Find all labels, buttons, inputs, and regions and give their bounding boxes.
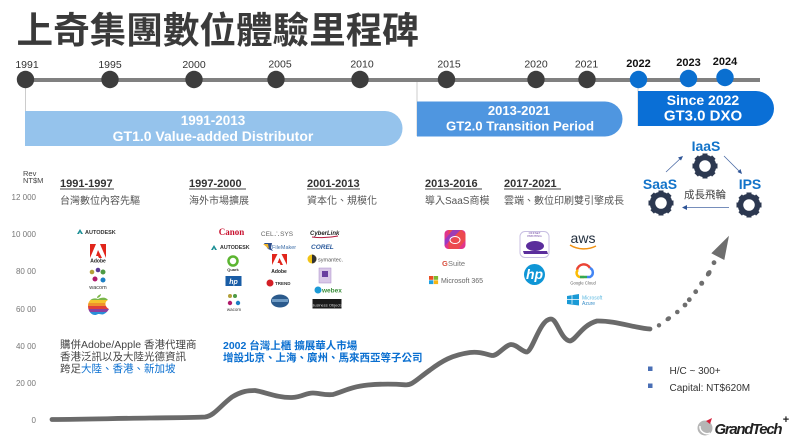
logos 1997-2000: CyberLink [310, 231, 340, 237]
timeline: 2022 [626, 58, 651, 70]
period: 2001-2013: 2001-2013 [307, 178, 360, 190]
period: 1991-1997: 台灣數位內容先驅 [60, 194, 140, 207]
timeline [15, 56, 760, 146]
timeline: 2021 [575, 58, 598, 70]
logos 2017-2021: aws [571, 230, 595, 246]
note: acquisitions: 購併Adobe/Apple 香港代理商 [60, 338, 197, 351]
growth flywheel: 成長飛輪 [684, 188, 726, 201]
logos 1997-2000: wacom [227, 307, 241, 312]
era bar: GT3.0: Since 2022 [667, 92, 739, 108]
logos 1997-2000: Canon [219, 227, 244, 237]
timeline: 2005 [268, 58, 292, 70]
era bar: GT2.0: GT2.0 Transition Period [446, 118, 594, 134]
timeline: 2015 [437, 58, 461, 70]
period: 1997-2000: 1997-2000 [189, 178, 242, 190]
logos 2017-2021: PRINTING [527, 234, 542, 238]
y axis: 10 000 [12, 230, 37, 239]
logos 2017-2021: Google Cloud [570, 280, 596, 286]
timeline: 2020 [524, 58, 548, 70]
company stats: Capital: NT$620M [670, 383, 750, 394]
logos 1991-1997: Adobe [90, 258, 106, 264]
logos 2013-2016: Suite [448, 259, 465, 268]
logo: GrandTech [698, 414, 789, 438]
logos 1991-1997: AUTODESK [85, 230, 116, 236]
y axis: 60 00 [16, 305, 37, 314]
period: 1991-1997: 1991-1997 [60, 178, 113, 190]
logos 1997-2000: hp [229, 279, 238, 286]
logos 2013-2016 [429, 230, 483, 285]
logos 1997-2000: COREL [311, 244, 334, 251]
era bar: GT1.0: 1991-2013 [181, 113, 246, 128]
logos 1997-2000: Business Objects [312, 302, 342, 308]
period: 1997-2000 [189, 178, 249, 207]
logos 2013-2016: Microsoft 365 [441, 278, 483, 285]
logos 1997-2000: Adobe [271, 269, 287, 275]
logos 1997-2000: TREND [275, 281, 291, 286]
timeline: 2010 [350, 58, 374, 70]
period: 2017-2021: 2017-2021 [504, 178, 557, 190]
logos 2013-2016: G [442, 259, 448, 268]
era bar: GT1.0: GT1.0 Value-added Distributor [113, 128, 314, 144]
logos 2017-2021: Microsoft [582, 296, 603, 302]
logo: GrandTech: + [783, 414, 789, 426]
logos 1997-2000: FileMaker [272, 245, 296, 251]
timeline: 1991 [15, 59, 39, 71]
period: 2013-2016 [425, 178, 489, 207]
growth flywheel: IPS [739, 176, 761, 192]
logos 1991-1997: wacom [88, 285, 107, 291]
period: 2013-2016: 2013-2016 [425, 178, 478, 190]
note: acquisitions: 跨足大陸、香港、新加坡 [60, 362, 176, 375]
period: 2001-2013: 資本化、規模化 [307, 194, 377, 207]
note: 2002 listing: 2002 台灣上櫃 擴展華人市場 [223, 339, 358, 352]
y axis: Rev [23, 169, 37, 178]
period: 1991-1997 [60, 178, 140, 207]
title: 上奇集團數位體驗里程碑 [16, 1, 419, 54]
period: 2017-2021: 雲端、數位印刷雙引擎成長 [504, 194, 624, 207]
company stats [648, 366, 750, 394]
logos 1991-1997 [77, 229, 116, 316]
y axis: NT$M [23, 176, 43, 185]
period: 2001-2013 [307, 178, 377, 207]
company stats: H/C ~ 300+ [670, 366, 721, 377]
y axis: 80 00 [16, 267, 37, 276]
logos 1997-2000: CEL∴SYS [261, 231, 294, 238]
y axis: 20 00 [16, 379, 37, 388]
y axis: 40 00 [16, 342, 37, 351]
timeline: 1995 [98, 59, 122, 71]
period: 1997-2000: 海外市場擴展 [189, 194, 249, 207]
y axis [12, 169, 43, 425]
note: 2002 listing: 增設北京、上海、廣州、馬來西亞等子公司 [223, 351, 422, 364]
period: 2017-2021 [504, 178, 624, 207]
logo: GrandTech: GrandTech [714, 421, 782, 438]
logos 2017-2021: hp [526, 266, 543, 282]
growth flywheel: IaaS [692, 138, 720, 154]
note: 2002 listing [223, 339, 422, 364]
growth flywheel [643, 138, 767, 223]
timeline: 2023 [676, 57, 701, 69]
logos 1997-2000: webex [321, 288, 342, 294]
logos 2017-2021: OFFSET [529, 231, 541, 235]
logos 1997-2000: AUTODESK [220, 245, 250, 251]
growth flywheel: SaaS [643, 176, 677, 192]
note: acquisitions [60, 338, 197, 375]
era bar: GT3.0 [638, 91, 774, 126]
period: 2013-2016: 導入SaaS商模 [425, 194, 489, 207]
logos 1997-2000: Quark [227, 267, 240, 272]
era bar: GT2.0 [417, 102, 622, 136]
timeline: 2000 [182, 59, 206, 71]
y axis: 12 000 [12, 193, 37, 202]
logos 2017-2021: Azure [582, 301, 595, 307]
timeline: 2024 [713, 56, 738, 68]
era bar: GT1.0 [25, 111, 402, 146]
projected dotted arrow [657, 236, 729, 327]
logos 1997-2000: symantec. [318, 258, 344, 264]
y axis: 0 [32, 416, 37, 425]
logos 2017-2021 [520, 230, 603, 307]
era bar: GT3.0: GT3.0 DXO [664, 108, 743, 124]
note: acquisitions: 香港泛訊以及大陸光德資訊 [60, 350, 186, 363]
revenue line chart [52, 319, 650, 420]
era bar: GT2.0: 2013-2021 [488, 103, 550, 118]
logos 1997-2000 [211, 227, 344, 312]
